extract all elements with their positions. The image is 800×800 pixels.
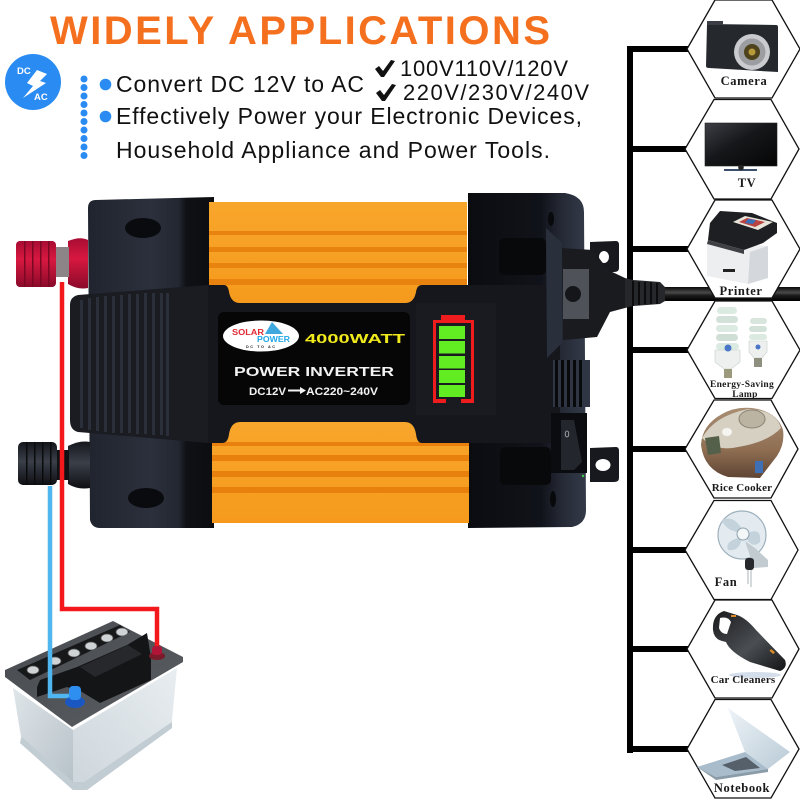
mounting tabs	[590, 241, 619, 482]
appliance: camera	[687, 0, 800, 98]
appliance: notebook	[687, 700, 799, 798]
hexagon: printer	[687, 200, 800, 298]
conversion text	[249, 386, 379, 398]
logo: solar power: DC TO AC	[246, 345, 275, 349]
red wire	[62, 282, 157, 650]
battery cover	[37, 633, 151, 703]
label: Energy-Saving Lamp: Energy-Saving	[710, 380, 774, 390]
power cord	[660, 287, 800, 301]
logo: solar power	[223, 320, 299, 352]
car battery	[5, 282, 183, 790]
orange bottom heatsink	[212, 422, 469, 523]
battery body	[13, 668, 177, 790]
label: TV: TV	[738, 176, 756, 190]
icon: TV	[705, 123, 777, 171]
icon: printer	[707, 211, 777, 284]
battery indicator	[433, 315, 474, 403]
battery screw strip	[17, 625, 130, 680]
hexagon: rice cooker	[685, 400, 798, 498]
appliance: energy-saving lamp	[687, 301, 800, 400]
icon: lamps	[715, 307, 767, 378]
plug flange	[546, 228, 562, 358]
battery lid	[5, 621, 183, 727]
hexagon: lamp	[687, 301, 800, 398]
indicator panel	[416, 303, 496, 415]
label: Rice Cooker: Rice Cooker	[712, 482, 772, 494]
feature text block: Household Appliance and Power Tools.	[116, 137, 550, 163]
orange top heatsink	[209, 202, 467, 303]
hexagon: camera	[687, 0, 800, 98]
plug body	[562, 248, 665, 340]
inverter	[16, 193, 665, 528]
right housing details	[499, 212, 590, 507]
centre band	[208, 285, 560, 443]
icon: fan	[718, 511, 768, 587]
appliance: TV	[685, 100, 799, 199]
label: Car Cleaners: Car Cleaners	[711, 674, 776, 686]
dotted vertical rule	[80, 76, 88, 159]
hexagon: TV	[685, 100, 799, 199]
icon: DC to AC badge	[5, 54, 61, 110]
blue wire	[50, 486, 74, 696]
voltage options: 220V/230V/240V	[403, 80, 589, 105]
title: WIDELY APPLICATIONS	[50, 9, 550, 53]
feature text block	[100, 71, 582, 163]
logo: solar power: SOLAR	[232, 328, 264, 337]
power bus line	[627, 46, 689, 753]
label: Energy-Saving Lamp: Lamp	[732, 390, 758, 400]
appliance: printer	[687, 200, 800, 298]
icon: notebook	[697, 708, 790, 780]
icon: car vacuum	[713, 611, 786, 678]
logo: solar power: POWER	[257, 335, 290, 344]
feature text block: Convert DC 12V to AC	[116, 71, 364, 97]
blue battery terminal	[65, 686, 85, 708]
icon: rice cooker	[701, 408, 783, 478]
label: Fan: Fan	[715, 575, 737, 589]
conversion text: DC12V	[249, 386, 287, 398]
icon: DC to AC badge: DC	[17, 66, 31, 77]
rocker switch	[551, 413, 587, 477]
spec label	[218, 312, 410, 405]
hexagon: car cleaners	[687, 600, 799, 698]
feature text block: Effectively Power your Electronic Devices,	[116, 103, 582, 129]
left grip	[70, 285, 208, 443]
label: Camera: Camera	[721, 74, 767, 88]
right end cap	[468, 193, 586, 528]
positive terminal	[16, 238, 88, 288]
icon: camera	[706, 21, 778, 72]
appliance: car cleaners	[687, 600, 799, 698]
appliance: fan	[685, 500, 798, 600]
red battery terminal	[149, 646, 165, 660]
voltage options: 100V110V/120V	[400, 56, 568, 81]
hexagon: notebook	[687, 700, 799, 798]
label: Notebook: Notebook	[714, 781, 770, 795]
hexagon: fan	[685, 500, 798, 600]
negative terminal	[18, 442, 90, 488]
appliance: rice cooker	[685, 400, 798, 498]
cap slots	[125, 218, 164, 508]
left end cap	[88, 197, 214, 528]
icon: DC to AC badge: AC	[34, 92, 48, 103]
label: Energy-Saving Lamp	[710, 380, 774, 400]
product name: POWER INVERTER	[234, 365, 394, 379]
label: Printer: Printer	[719, 284, 763, 298]
wattage: 4000WATT	[305, 332, 406, 346]
conversion text: AC220~240V	[306, 386, 379, 398]
voltage options	[375, 56, 589, 105]
